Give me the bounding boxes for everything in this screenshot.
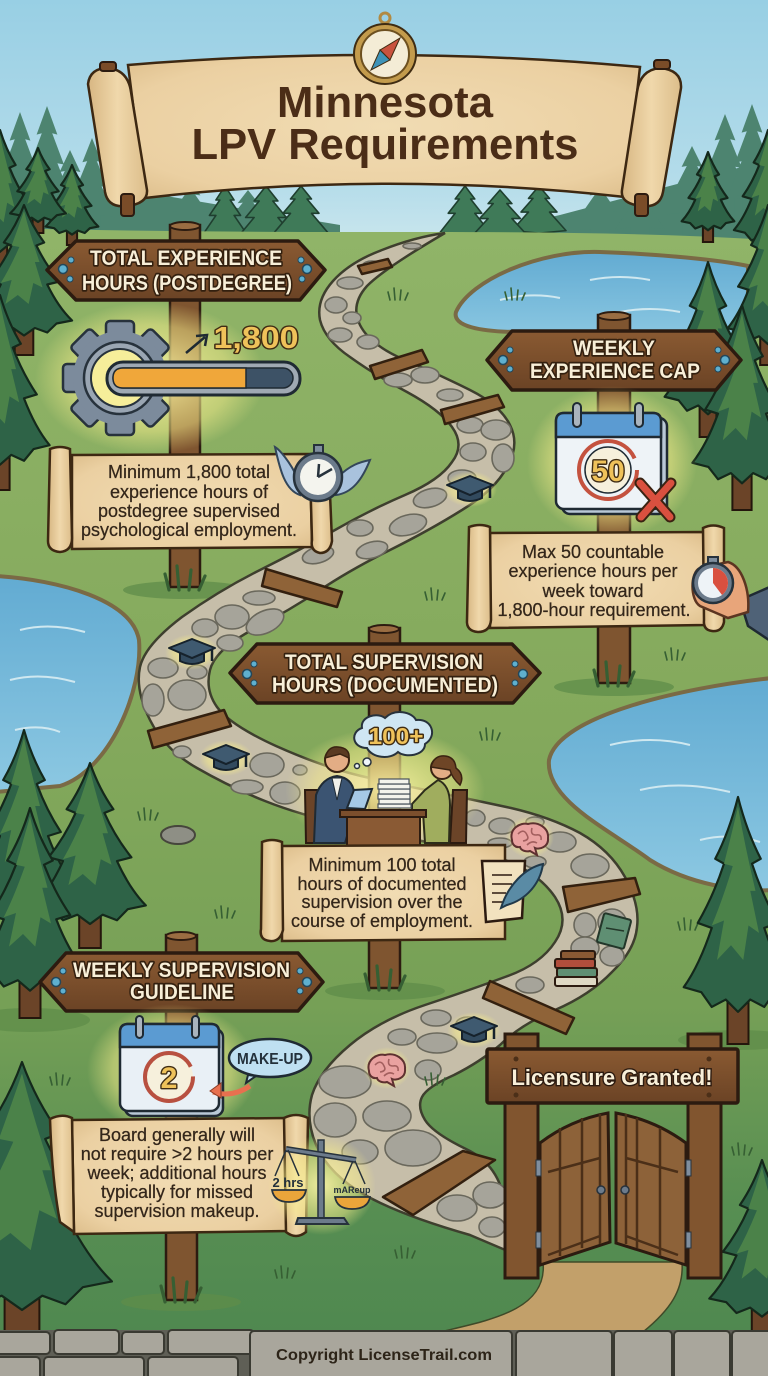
panel: weekly experience cap	[467, 331, 768, 642]
illustration: supervision meeting	[285, 712, 485, 852]
forest trees: upper right	[665, 130, 768, 510]
icon: balance scale: mAReup	[333, 1185, 371, 1195]
lake: left	[0, 576, 139, 792]
dirt approach to gate	[440, 1262, 682, 1332]
text scroll: total supervision hours	[261, 840, 505, 941]
gate sign	[487, 1049, 738, 1103]
heading sign: weekly experience cap: WEEKLY	[573, 337, 655, 360]
thought cloud: 100+	[354, 712, 432, 768]
rock	[161, 826, 195, 844]
panel: total supervision hours	[230, 644, 554, 941]
text scroll: weekly supervision guideline: week; additional hours	[86, 1163, 267, 1183]
signpost 1 post	[170, 222, 200, 587]
forest tree: bottom left	[0, 1062, 112, 1347]
heading sign: total experience hours: HOURS (POSTDEGREE)	[82, 272, 292, 295]
path planks	[148, 259, 640, 1215]
gate posts	[505, 1034, 721, 1278]
text scroll: weekly experience cap: experience hours per	[508, 561, 678, 581]
heading sign: weekly supervision guideline: WEEKLY SUPERVISION	[73, 959, 290, 982]
title banner	[88, 13, 681, 216]
icon: calendar 50 with red x	[527, 386, 697, 538]
path icons: books	[555, 913, 631, 986]
mid-distance pines	[202, 186, 566, 261]
text scroll: total experience hours: psychological employment.	[81, 520, 297, 540]
heading sign: total supervision hours: TOTAL SUPERVISION	[285, 651, 483, 674]
callout: make-up speech bubble: MAKE-UP	[237, 1051, 303, 1068]
grass tufts	[50, 288, 752, 1278]
title text: Minnesota	[277, 79, 494, 127]
banner scroll	[88, 55, 681, 216]
panel: total experience hours	[35, 241, 370, 553]
text scroll: weekly supervision guideline: not require >2 hours per	[81, 1144, 273, 1164]
heading sign: weekly experience cap: EXPERIENCE CAP	[530, 360, 700, 383]
heading sign: weekly supervision guideline	[40, 953, 323, 1011]
path icons: graduation caps	[165, 471, 501, 1048]
sky background	[0, 0, 768, 260]
text scroll: weekly experience cap: 1,800-hour requirement.	[497, 600, 691, 620]
lake: upper right	[456, 252, 748, 340]
icon: hand holding stopwatch	[692, 557, 768, 642]
icon: gear and progress bar	[35, 302, 305, 454]
text scroll: weekly supervision guideline: Board generally will	[99, 1125, 255, 1145]
signpost 4 post	[166, 932, 197, 1300]
licensure gate	[487, 1034, 738, 1278]
text scroll: total supervision hours: course of employment.	[291, 911, 473, 931]
forest trees: upper left	[0, 130, 98, 490]
signpost 2 post	[598, 312, 630, 683]
icon: brain on path	[506, 816, 554, 858]
text scroll: total experience hours: experience hours of	[110, 482, 269, 502]
copyright text: Copyright LicenseTrail.com	[276, 1347, 492, 1364]
text scroll: total supervision hours: hours of documented	[297, 874, 467, 894]
post base grass	[161, 566, 634, 1302]
title text	[192, 79, 578, 169]
winding stone path	[139, 233, 640, 1252]
icon: balance scale: 2 hrs	[272, 1175, 304, 1190]
icon: balance scale	[268, 1135, 376, 1235]
lake: right	[549, 678, 768, 890]
icon: calendar 2: 2	[161, 1062, 177, 1095]
text scroll: weekly supervision guideline: typically for missed	[101, 1182, 253, 1202]
ground shadows	[0, 581, 768, 1311]
path icon: brain	[363, 1047, 411, 1089]
text scroll: weekly experience cap: week toward	[541, 581, 644, 601]
icon: calendar 50 with red x: 50	[591, 455, 625, 488]
gate sign: Licensure Granted!	[512, 1065, 712, 1090]
thought cloud: 100+: 100+	[368, 723, 424, 749]
icon: winged stopwatch	[275, 445, 370, 501]
heading sign: weekly supervision guideline: GUIDELINE	[130, 981, 234, 1004]
text scroll: weekly experience cap	[467, 525, 724, 632]
text scroll: total supervision hours: Minimum 100 total	[308, 855, 456, 875]
forest trees: lower left	[0, 730, 146, 1018]
text scroll: total experience hours	[48, 447, 332, 553]
heading sign: total supervision hours	[230, 644, 540, 703]
heading sign: weekly experience cap	[487, 331, 741, 390]
panel: weekly supervision guideline	[40, 953, 376, 1236]
icon: scroll and quill	[482, 861, 543, 922]
text scroll: weekly supervision guideline	[50, 1115, 308, 1236]
icon: gear and progress bar: 1,800	[214, 320, 298, 355]
signpost 3 post	[369, 625, 400, 988]
text scroll: total supervision hours: supervision over the	[301, 892, 463, 912]
heading sign: total experience hours	[47, 241, 325, 300]
icon: calendar 2	[87, 1004, 257, 1136]
stone wall footer	[0, 1330, 768, 1376]
callout: make-up speech bubble	[229, 1039, 311, 1083]
text scroll: weekly supervision guideline: supervision makeup.	[94, 1201, 260, 1221]
title text: LPV Requirements	[192, 121, 578, 169]
text scroll: weekly experience cap: Max 50 countable	[522, 542, 664, 562]
text scroll: total experience hours: postdegree supervised	[98, 501, 280, 521]
path stones	[142, 243, 626, 1237]
text scroll: total experience hours: Minimum 1,800 total	[108, 462, 270, 482]
heading sign: total supervision hours: HOURS (DOCUMENTED)	[272, 674, 498, 697]
heading sign: total experience hours: TOTAL EXPERIENCE	[90, 247, 282, 270]
icon: compass	[354, 13, 416, 84]
distant tree line	[0, 104, 768, 260]
forest trees: right side	[684, 797, 768, 1340]
gate doors	[536, 1113, 691, 1265]
